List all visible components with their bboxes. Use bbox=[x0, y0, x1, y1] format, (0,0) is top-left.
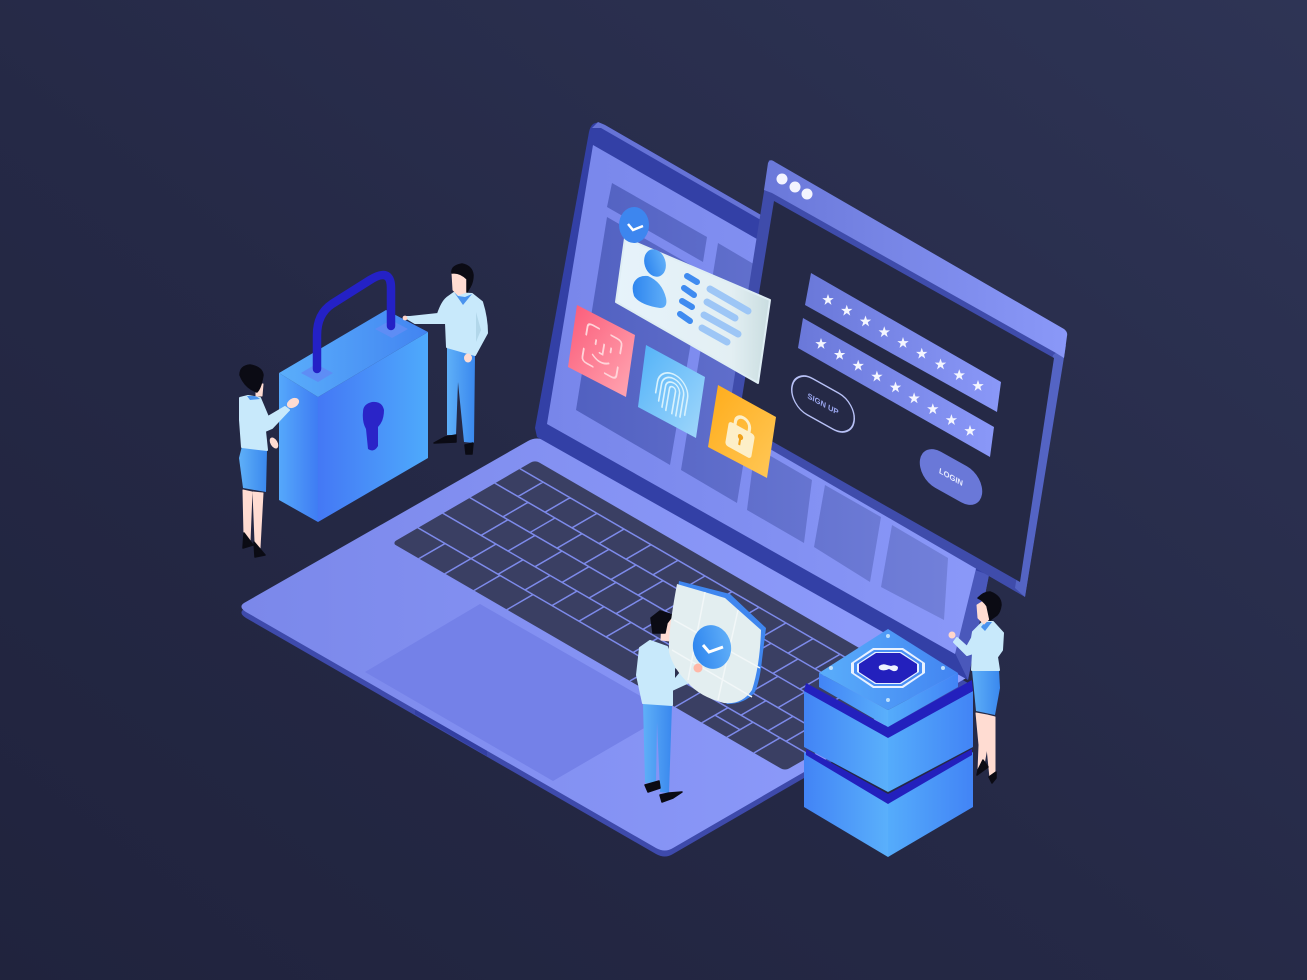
window dark area bbox=[738, 201, 1054, 582]
laptop base bbox=[241, 438, 968, 856]
login button bbox=[917, 442, 985, 512]
screen surface bbox=[547, 145, 1020, 654]
login button: LOGIN bbox=[938, 466, 964, 488]
padlock bbox=[279, 275, 428, 522]
window dots bbox=[776, 174, 812, 200]
screws bbox=[829, 634, 945, 702]
person: woman at server block bbox=[948, 592, 1003, 783]
person: man with shield bbox=[637, 611, 698, 802]
trackpad bbox=[365, 604, 670, 781]
check badge bbox=[619, 207, 649, 243]
sign up button: SIGN UP bbox=[807, 391, 840, 417]
keyhole bbox=[363, 402, 384, 450]
laptop screen bbox=[535, 122, 1030, 680]
person: man at padlock bbox=[403, 264, 487, 454]
person icon bbox=[633, 246, 669, 308]
card lines bbox=[680, 276, 748, 342]
shackle bbox=[317, 275, 391, 369]
octagon keyhole plate bbox=[851, 648, 925, 688]
server block stack bbox=[804, 629, 973, 857]
top block bbox=[819, 629, 958, 727]
lower block bbox=[804, 749, 973, 857]
fingerprint tile bbox=[638, 345, 705, 438]
password field 1 bbox=[805, 273, 1001, 412]
password field 2 bbox=[798, 318, 994, 457]
login window bbox=[727, 160, 1067, 597]
shield bbox=[669, 581, 766, 704]
middle block bbox=[804, 680, 973, 792]
shackle plates bbox=[301, 320, 408, 382]
person: woman at padlock bbox=[239, 365, 301, 557]
keyboard bbox=[392, 460, 928, 771]
sign up button bbox=[789, 369, 857, 439]
lock tile bbox=[708, 385, 776, 478]
screen panels bbox=[576, 183, 948, 620]
shield check bbox=[689, 622, 735, 672]
window title bar bbox=[764, 160, 1067, 358]
face ID tile bbox=[568, 305, 635, 397]
ID card bbox=[616, 207, 770, 383]
